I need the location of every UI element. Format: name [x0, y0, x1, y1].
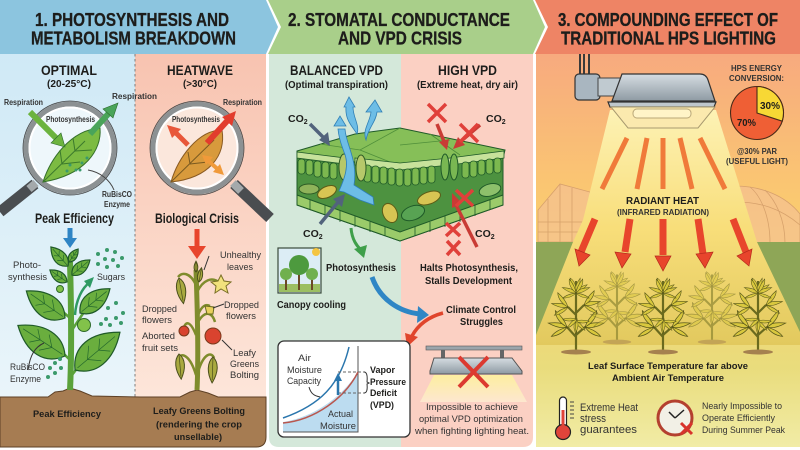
CO2 labels: 2 [304, 119, 308, 126]
header 1: 1. PHOTOSYNTHESIS AND [35, 10, 229, 30]
VPD chart card: Actual [328, 409, 353, 420]
wilting plant labels: Aborted [142, 331, 175, 342]
balanced VPD heading: BALANCED VPD [290, 62, 383, 78]
soil captions [33, 406, 245, 443]
canopy cooling label: Canopy cooling [277, 299, 346, 311]
soil captions: unsellable) [174, 432, 222, 443]
labels heatwave lens [172, 98, 262, 124]
wilting plant labels: leaves [227, 262, 253, 273]
VPD chart card: Deficit [370, 388, 398, 399]
panel 2: stomatal conductance [269, 50, 533, 447]
down arrows [63, 228, 206, 259]
lamp caption: when fighting lighting heat. [414, 426, 529, 437]
radiant heat arrows [575, 138, 752, 271]
climate control label [446, 304, 516, 328]
labels optimal lens: Enzyme [104, 200, 130, 209]
labels optimal lens [4, 92, 157, 209]
CO2 labels [288, 113, 506, 241]
VPD chart card: Moisture [320, 421, 356, 432]
photosynthesis label: Photosynthesis [326, 262, 396, 274]
pie chart label: HPS ENERGY [731, 64, 783, 73]
stressed crop plants [548, 268, 786, 354]
header 2: 2. STOMATAL CONDUCTANCE [288, 10, 510, 30]
CO2 labels: 2 [491, 234, 495, 241]
lamp caption: optimal VPD optimization [419, 414, 523, 425]
radiant heat label [617, 195, 709, 217]
respiration arrows optimal [30, 103, 118, 147]
labels optimal lens: Photosynthesis [46, 115, 95, 124]
heatwave heading: HEATWAVE [167, 62, 233, 78]
wilting plant labels: Dropped [224, 300, 259, 311]
radiant heat label: RADIANT HEAT [626, 195, 700, 207]
heatwave heading: (>30°C) [183, 78, 217, 90]
labels optimal lens: RuBisCO [102, 190, 132, 199]
operate efficiently text [702, 401, 785, 436]
lamp caption [414, 402, 529, 437]
halts photosynthesis label: Halts Photosynthesis, [420, 262, 518, 274]
red curved arrow [405, 313, 443, 347]
optimal heading: OPTIMAL [41, 62, 97, 78]
header 2: AND VPD CRISIS [338, 28, 462, 48]
operate efficiently text: During Summer Peak [702, 425, 785, 436]
extreme heat text: guarantees [580, 424, 638, 436]
magnifier optimal [0, 101, 117, 212]
peak efficiency label: Peak Efficiency [35, 210, 114, 226]
climate control label: Struggles [460, 316, 503, 328]
CO2 labels: CO [288, 113, 304, 125]
high VPD heading [417, 62, 518, 91]
soil captions: Leafy Greens Bolting [153, 406, 245, 417]
CO2 labels: CO [475, 228, 491, 240]
healthy plant labels: synthesis [8, 272, 47, 283]
balanced VPD heading [285, 62, 388, 91]
header 3 [535, 0, 800, 54]
labels heatwave lens: Photosynthesis [172, 115, 220, 124]
header 2 [262, 0, 548, 54]
labels optimal lens: Respiration [4, 98, 43, 107]
pie chart: 30% [760, 100, 781, 112]
leaf temperature caption [588, 361, 748, 384]
grass [536, 242, 800, 336]
wilting plant labels [142, 250, 261, 381]
high VPD heading: HIGH VPD [438, 62, 497, 78]
VPD chart card: (VPD) [370, 400, 394, 411]
panel 3: HPS lighting [536, 50, 800, 447]
leaf cross-section [297, 128, 505, 241]
soil [0, 388, 266, 447]
halts photosynthesis label [420, 262, 518, 287]
healthy plant [10, 243, 129, 390]
wilting plant labels: flowers [226, 311, 256, 322]
leaf temperature caption: Leaf Surface Temperature far above [588, 361, 748, 372]
healthy plant labels: RuBisCO [10, 362, 45, 373]
heatwave heading [167, 62, 233, 90]
extreme heat text: stress [580, 413, 606, 425]
soil captions: (rendering the crop [156, 420, 242, 430]
high VPD heading: (Extreme heat, dry air) [417, 79, 518, 91]
icon: thermometer [556, 397, 574, 440]
VPD chart card: Air [298, 353, 311, 364]
crossed-out lamp [420, 346, 527, 402]
operate efficiently text: Nearly Impossible to [702, 401, 782, 412]
optimal heading: (20-25°C) [47, 78, 91, 90]
VPD chart card: Vapor [370, 365, 395, 376]
radiant heat label: (INFRARED RADIATION) [617, 208, 709, 217]
greenhouse backdrop left [538, 184, 590, 242]
wilting plant labels: Leafy [233, 348, 256, 359]
CO2 labels: 2 [502, 119, 506, 126]
pie caption [726, 147, 788, 166]
pie caption: @30% PAR [737, 147, 777, 156]
water vapour arrows [334, 97, 382, 205]
balanced VPD heading: (Optimal transpiration) [285, 79, 388, 91]
wilting plant labels: Dropped [142, 304, 177, 315]
leaf temperature caption: Ambient Air Temperature [612, 373, 724, 384]
pie chart label: CONVERSION: [729, 74, 784, 83]
wilting plant labels: flowers [142, 315, 172, 326]
healthy plant labels [8, 260, 125, 385]
wilting plant labels: fruit sets [142, 343, 178, 354]
CO2 labels: 2 [319, 234, 323, 241]
biological crisis label: Biological Crisis [155, 210, 239, 226]
wilting plant labels: Unhealthy [220, 250, 261, 261]
VPD chart card: Moisture [287, 365, 322, 376]
extreme heat text [580, 402, 638, 436]
wilting plant labels: Bolting [230, 370, 259, 381]
header 1 [0, 0, 281, 54]
halts photosynthesis label: Stalls Development [425, 275, 512, 287]
magnifier heatwave [150, 101, 270, 218]
labels optimal lens: Respiration [112, 92, 157, 101]
photosynthesis green arrow [351, 228, 367, 258]
pie chart label [729, 64, 784, 83]
sugar and enzyme dots [46, 248, 125, 379]
wilting plant labels: Greens [230, 359, 259, 370]
CO2 labels: CO [303, 228, 319, 240]
CO2 labels: CO [486, 113, 502, 125]
blocked CO2 arrows and crosses [428, 104, 480, 255]
labels heatwave lens: Respiration [223, 98, 262, 107]
healthy plant labels: Sugars [97, 272, 125, 283]
soil captions: Peak Efficiency [33, 409, 102, 420]
lamp caption: Impossible to achieve [426, 402, 518, 413]
VPD chart card: Capacity [287, 376, 321, 387]
VPD chart card [278, 341, 410, 437]
header 1: METABOLISM BREAKDOWN [31, 28, 236, 48]
healthy plant labels: Photo- [13, 260, 41, 271]
pie caption: (USEFUL LIGHT) [726, 157, 788, 166]
optimal heading [41, 62, 97, 90]
greenhouse backdrop right [735, 186, 800, 243]
icon: clock with cross [658, 401, 692, 435]
healthy plant labels: Enzyme [10, 374, 41, 385]
wilting plant [175, 256, 232, 390]
canopy cooling picture [278, 248, 321, 293]
lamp housing [575, 54, 716, 128]
light beam [536, 110, 800, 345]
climate control label: Climate Control [446, 304, 516, 316]
VPD chart card: Pressure [370, 377, 406, 388]
extreme heat text: Extreme Heat [580, 402, 638, 414]
blue curved arrow [372, 277, 429, 323]
pie chart [730, 86, 784, 140]
panel 1: photosynthesis [0, 50, 270, 447]
operate efficiently text: Operate Efficiently [702, 413, 775, 424]
CO2 entry arrows [310, 124, 345, 224]
pie chart: 70% [737, 117, 757, 129]
